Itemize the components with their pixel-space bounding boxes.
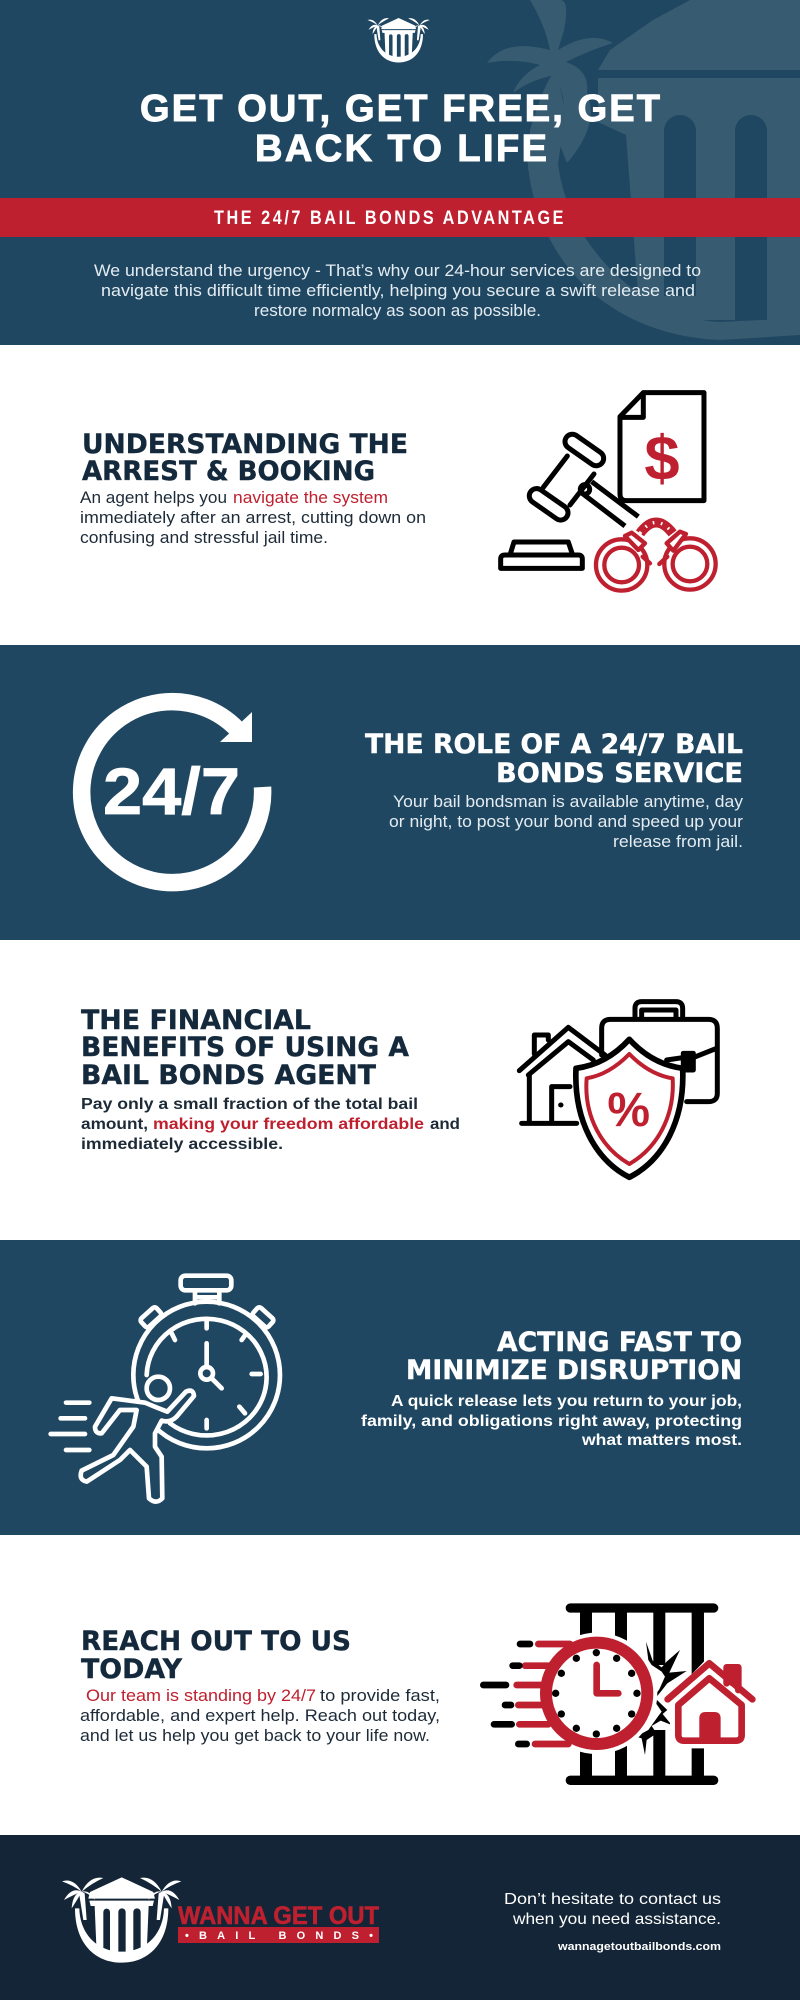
icon: stopwatch and runner bbox=[51, 1276, 280, 1502]
contact text bbox=[504, 1891, 721, 1953]
house bbox=[668, 1656, 760, 1748]
body text: amount, bbox=[81, 1116, 148, 1133]
contact text: Don’t hesitate to contact us bbox=[504, 1891, 721, 1908]
heading bbox=[406, 1327, 742, 1386]
heading bbox=[82, 429, 408, 487]
panel: acting fast bbox=[0, 1240, 800, 1535]
body text: what matters most. bbox=[581, 1432, 742, 1449]
body text: Your bail bondsman is available anytime, day bbox=[393, 793, 744, 811]
heading: THE ROLE OF A 24/7 BAIL bbox=[365, 729, 743, 760]
body text: or night, to post your bond and speed up your bbox=[389, 813, 744, 831]
body text bbox=[80, 1687, 440, 1745]
heading bbox=[81, 1005, 409, 1091]
title: BACK TO LIFE bbox=[255, 128, 547, 170]
panel: reach out bbox=[0, 1535, 800, 1835]
briefcase bbox=[602, 1002, 717, 1102]
intro text: navigate this difficult time efficiently, helping you secure a swift release and bbox=[101, 282, 695, 300]
body text: to provide fast, bbox=[320, 1687, 440, 1705]
title: GET OUT, GET FREE, GET bbox=[140, 88, 660, 130]
bail document bbox=[620, 393, 704, 501]
clock bbox=[483, 1633, 657, 1754]
body text: Pay only a small fraction of the total bail bbox=[81, 1096, 418, 1113]
icon: 24/7 circular arrow: 24/7 bbox=[103, 754, 240, 828]
logo: wanna get out emblem bbox=[62, 1877, 181, 1963]
heading bbox=[365, 729, 743, 789]
heading: BENEFITS OF USING A bbox=[81, 1032, 409, 1063]
intro text bbox=[94, 262, 701, 320]
panel: financial benefits bbox=[0, 940, 800, 1240]
panel: footer bbox=[0, 1835, 800, 2000]
body text: affordable, and expert help. Reach out today, bbox=[80, 1707, 440, 1725]
handcuffs bbox=[596, 522, 716, 591]
heading: BONDS SERVICE bbox=[496, 758, 743, 789]
red subtitle band bbox=[0, 198, 800, 237]
runner bbox=[81, 1377, 194, 1502]
icon: gavel, bail document and handcuffs bbox=[501, 393, 716, 591]
contact text: wannagetoutbailbonds.com bbox=[557, 1941, 721, 1953]
heading: THE FINANCIAL bbox=[81, 1005, 311, 1036]
bail document: $ bbox=[644, 424, 680, 494]
logo: header emblem bbox=[367, 18, 430, 63]
heading: ARREST & BOOKING bbox=[82, 456, 375, 487]
panel: role of 24/7 service bbox=[0, 645, 800, 940]
body text: and let us help you get back to your life now. bbox=[80, 1727, 430, 1745]
intro text: restore normalcy as soon as possible. bbox=[254, 302, 541, 320]
intro text: We understand the urgency - That’s why our 24-hour services are designed to bbox=[94, 262, 701, 280]
brand wordmark bbox=[178, 1902, 379, 1943]
body text bbox=[80, 489, 426, 547]
body text: A quick release lets you return to your job, bbox=[391, 1393, 742, 1410]
body text: confusing and stressful jail time. bbox=[80, 529, 328, 547]
body text bbox=[81, 1096, 460, 1153]
heading: UNDERSTANDING THE bbox=[82, 429, 408, 460]
body text: and bbox=[430, 1116, 460, 1133]
body text: navigate the system bbox=[233, 489, 388, 507]
heading bbox=[81, 1626, 351, 1685]
body text: immediately after an arrest, cutting down on bbox=[80, 509, 426, 527]
crack bbox=[636, 1642, 687, 1755]
percent shield: % bbox=[607, 1083, 650, 1137]
body text: An agent helps you bbox=[80, 489, 227, 507]
icon: 24/7 circular arrow bbox=[82, 702, 263, 883]
heading: REACH OUT TO US bbox=[81, 1626, 351, 1657]
stopwatch bbox=[133, 1276, 280, 1448]
contact text: when you need assistance. bbox=[512, 1911, 721, 1928]
red subtitle band: THE 24/7 BAIL BONDS ADVANTAGE bbox=[214, 208, 566, 229]
speed lines bbox=[51, 1403, 89, 1450]
body text bbox=[389, 793, 744, 851]
heading: MINIMIZE DISRUPTION bbox=[406, 1355, 742, 1386]
watermark logo bbox=[487, 0, 800, 340]
house bbox=[519, 1027, 605, 1123]
icon: clock breaking jail bars toward home bbox=[483, 1603, 760, 1785]
brand wordmark: •BAIL BONDS• bbox=[185, 1930, 373, 1942]
heading: BAIL BONDS AGENT bbox=[81, 1060, 377, 1091]
body text: making your freedom affordable bbox=[153, 1116, 424, 1133]
jail bars bbox=[566, 1603, 718, 1785]
icon: house, briefcase and percent shield bbox=[519, 1002, 717, 1177]
panel: arrest and booking bbox=[0, 345, 800, 645]
heading: ACTING FAST TO bbox=[497, 1327, 742, 1358]
title bbox=[140, 88, 660, 170]
body text: family, and obligations right away, protecting bbox=[361, 1413, 742, 1430]
body text: immediately accessible. bbox=[81, 1136, 283, 1153]
brand wordmark: WANNA GET OUT bbox=[178, 1902, 379, 1930]
body text bbox=[361, 1393, 742, 1449]
body text: Our team is standing by 24/7 bbox=[86, 1687, 316, 1705]
body text: release from jail. bbox=[613, 833, 743, 851]
heading: TODAY bbox=[81, 1654, 182, 1685]
gavel bbox=[501, 431, 638, 568]
panel: header bbox=[0, 0, 800, 345]
percent shield bbox=[576, 1039, 683, 1177]
